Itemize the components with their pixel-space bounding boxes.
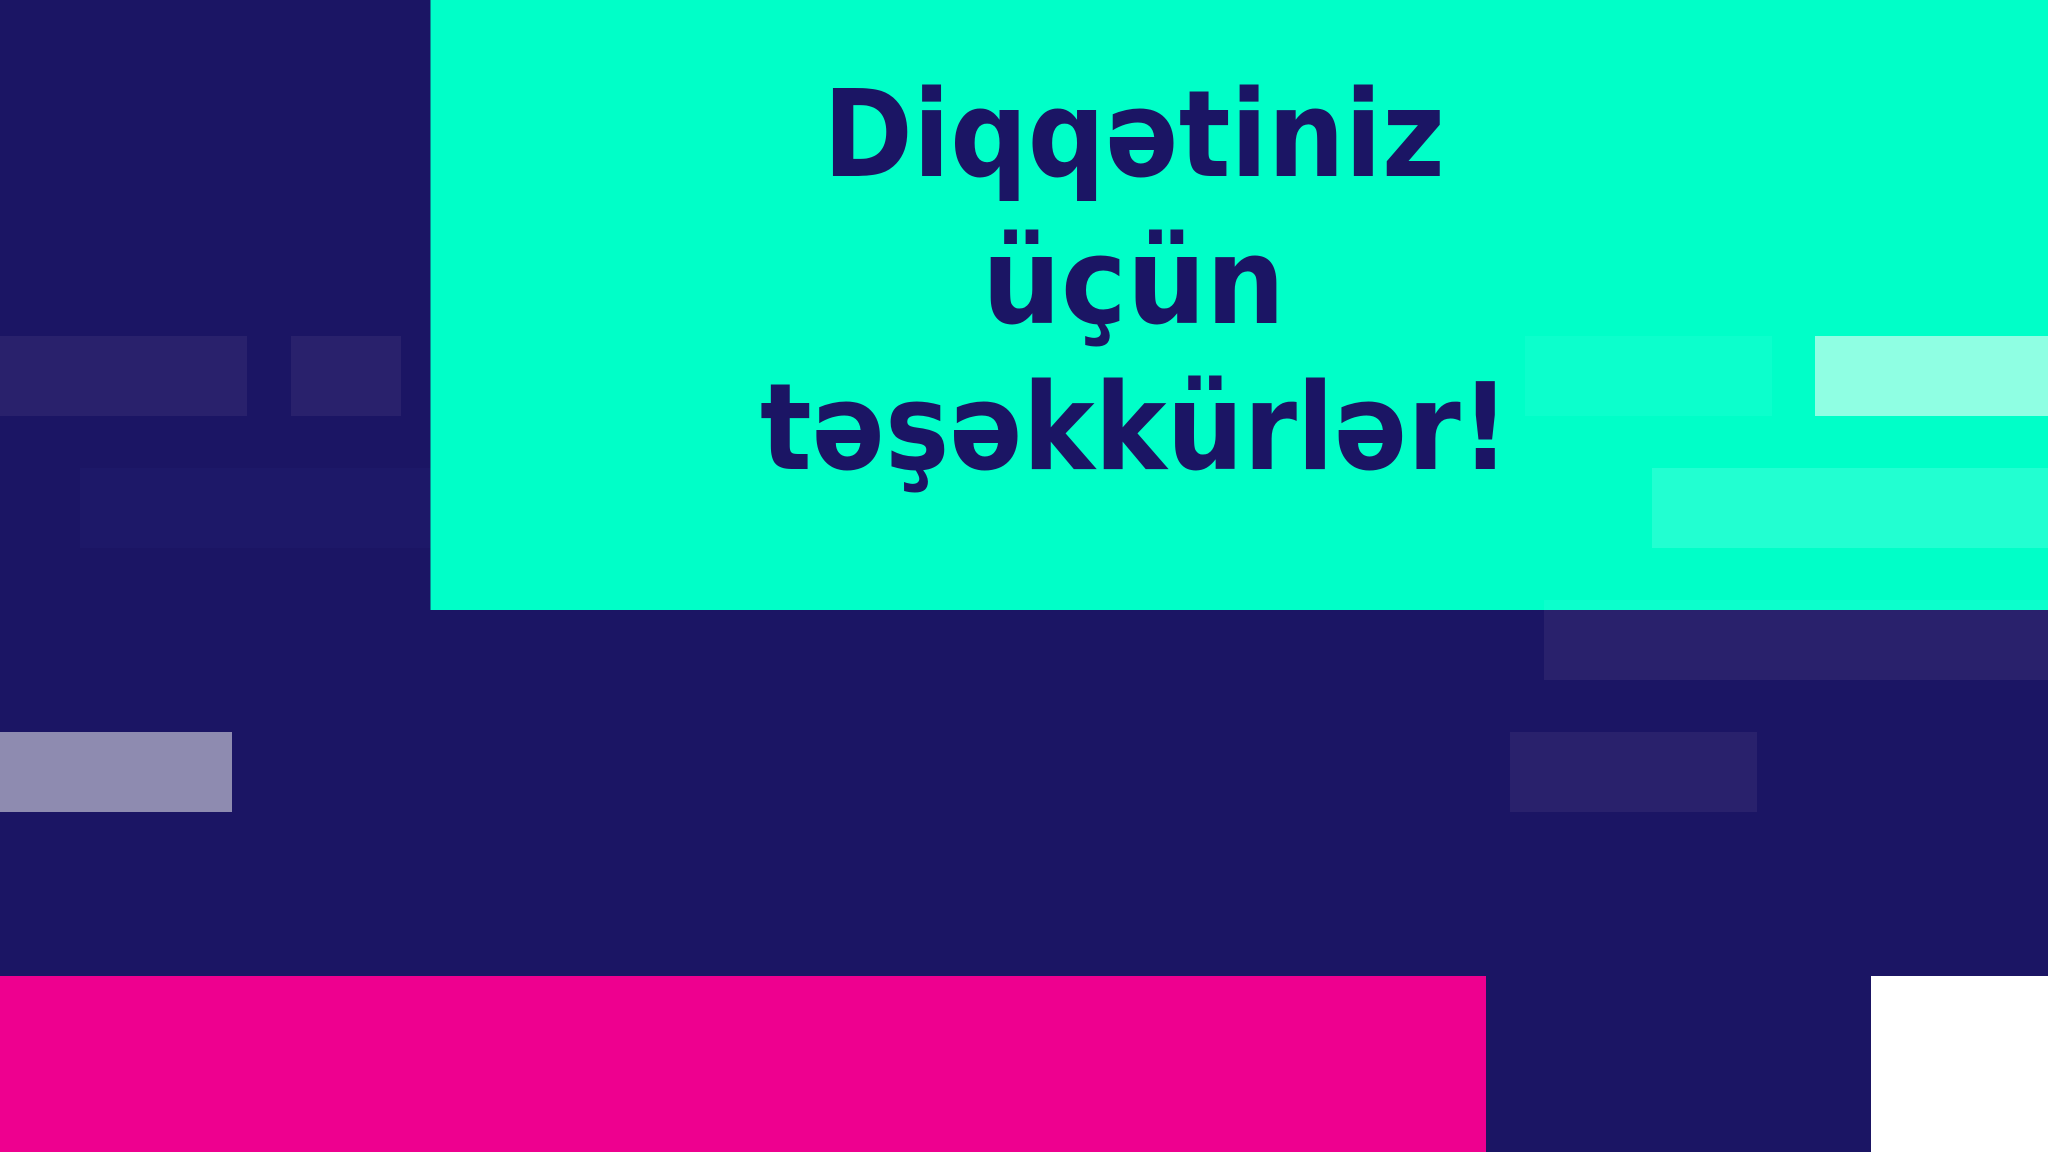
bar: faint teal strip on panel edge	[1544, 600, 2048, 610]
bar: faint right under teal	[1544, 610, 2048, 680]
bar: faint right lower	[1510, 732, 1757, 812]
bar: lavender left	[0, 732, 232, 812]
bar: light teal second row	[1652, 468, 2048, 548]
bar: faint teal top right	[1525, 336, 1772, 416]
title: üçün	[982, 213, 1285, 352]
bar: faint left top wide	[0, 336, 247, 416]
bar: magenta bottom	[0, 976, 1486, 1152]
title: Diqqətiniz	[823, 66, 1445, 205]
bar: white bottom right	[1871, 976, 2048, 1152]
panel: teal title panel	[430, 0, 2048, 610]
bar: faint left top short	[291, 336, 401, 416]
title	[760, 66, 1510, 498]
bar: faint left second row	[80, 468, 430, 548]
bar: pale teal top right	[1815, 336, 2048, 416]
title: təşəkkürlər!	[760, 359, 1510, 498]
